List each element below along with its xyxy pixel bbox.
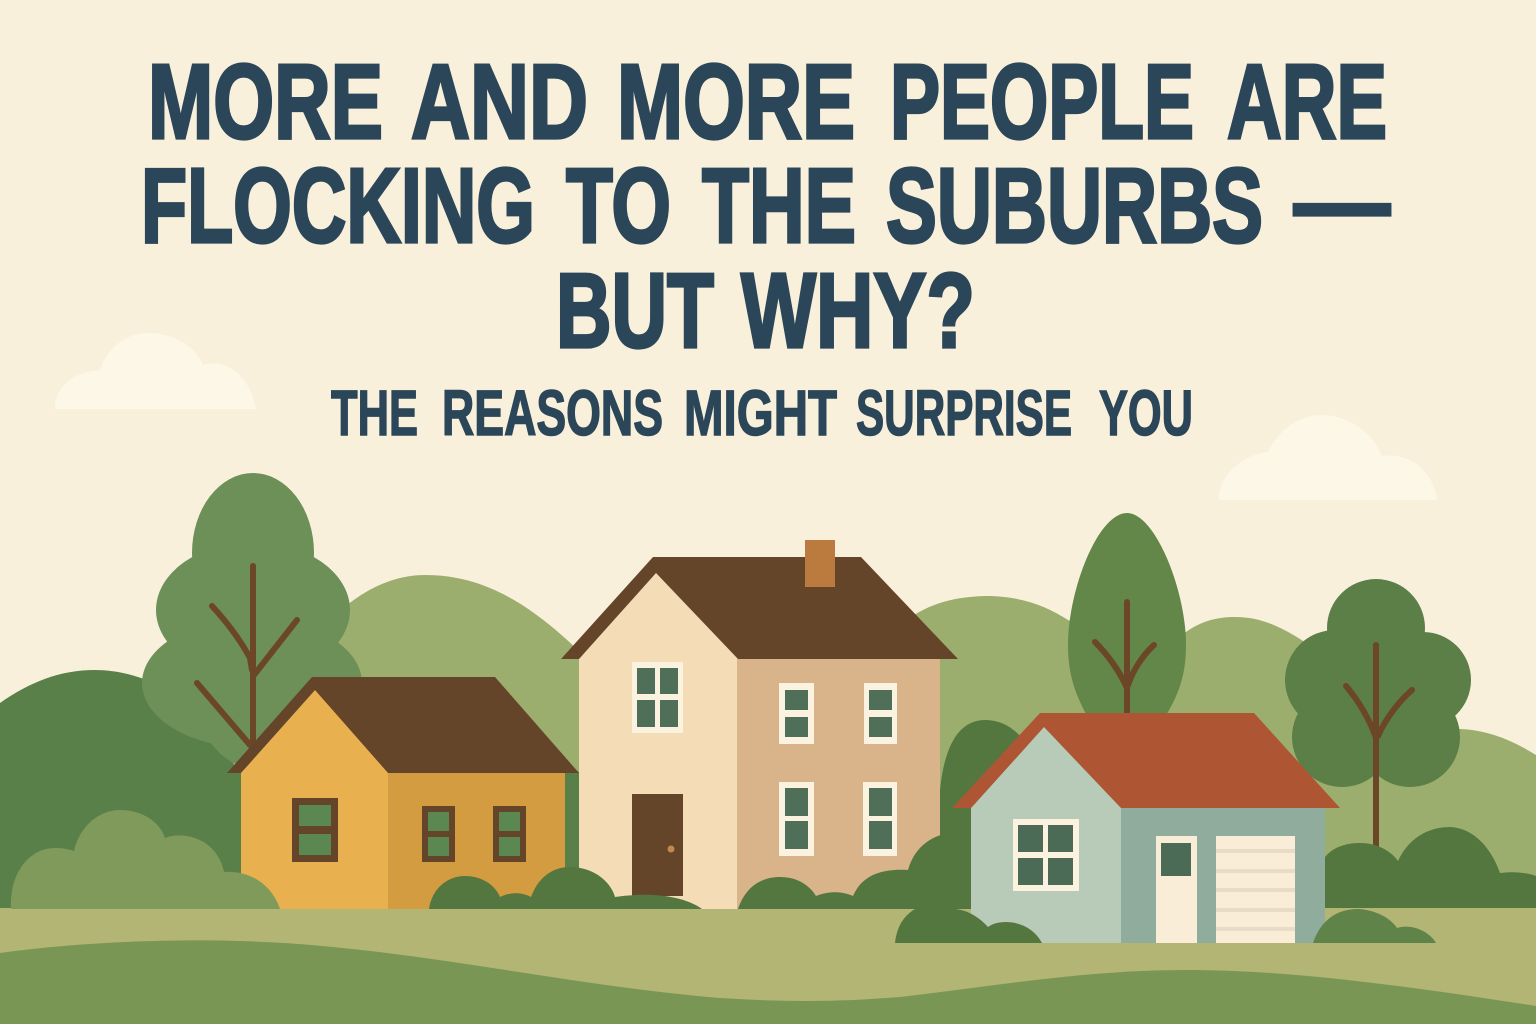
house: central two-storey — [561, 540, 958, 909]
right hedge — [1325, 827, 1536, 909]
door: blue house — [1156, 836, 1197, 943]
subtitle: YOU — [1099, 377, 1193, 449]
bush behind blue house — [940, 720, 1030, 909]
cloud: left — [55, 333, 256, 409]
tree: oval centre right — [1068, 513, 1186, 725]
title: MORE — [617, 43, 855, 161]
windows: upper right pair — [779, 683, 897, 744]
subtitle: SURPRISE — [856, 377, 1072, 449]
subtitle — [331, 377, 1193, 449]
title: TO — [566, 147, 671, 265]
title: WHY? — [741, 252, 975, 370]
title: ARE — [1227, 43, 1387, 161]
subtitle: REASONS — [442, 377, 663, 449]
subtitle: THE — [331, 377, 418, 449]
shrubs at central house — [429, 833, 972, 909]
window: yellow house right — [493, 809, 526, 859]
shrub at blue house — [895, 909, 1042, 943]
shrub right of blue house — [1313, 909, 1436, 943]
garage door — [1216, 836, 1295, 943]
title — [141, 43, 1390, 370]
window: yellow house middle — [422, 809, 455, 859]
title: SUBURBS — [886, 147, 1263, 265]
door — [632, 794, 683, 896]
windows: lower right pair — [779, 782, 897, 856]
roof: blue house — [952, 713, 1340, 808]
title: MORE — [148, 43, 383, 161]
title: — — [1294, 143, 1390, 261]
window: upper left — [632, 662, 683, 733]
title: THE — [702, 147, 856, 265]
roof: central house — [561, 557, 958, 659]
tree: round right — [1285, 579, 1471, 852]
subtitle: MIGHT — [684, 377, 837, 449]
left bush — [11, 810, 280, 909]
background hills — [0, 575, 1536, 910]
chimney — [805, 540, 835, 587]
tree: tall left — [142, 473, 362, 772]
title: FLOCKING — [141, 147, 535, 265]
window: yellow house left — [292, 802, 338, 858]
house: yellow — [227, 677, 579, 909]
foreground ground — [0, 940, 1536, 1024]
house: blue — [952, 713, 1340, 943]
title: BUT — [556, 252, 714, 370]
roof: yellow house — [227, 677, 579, 773]
lawn — [0, 908, 1536, 1024]
cloud: right — [1219, 415, 1437, 500]
title: AND — [411, 43, 588, 161]
window: blue house — [1013, 819, 1079, 891]
title: PEOPLE — [890, 43, 1194, 161]
